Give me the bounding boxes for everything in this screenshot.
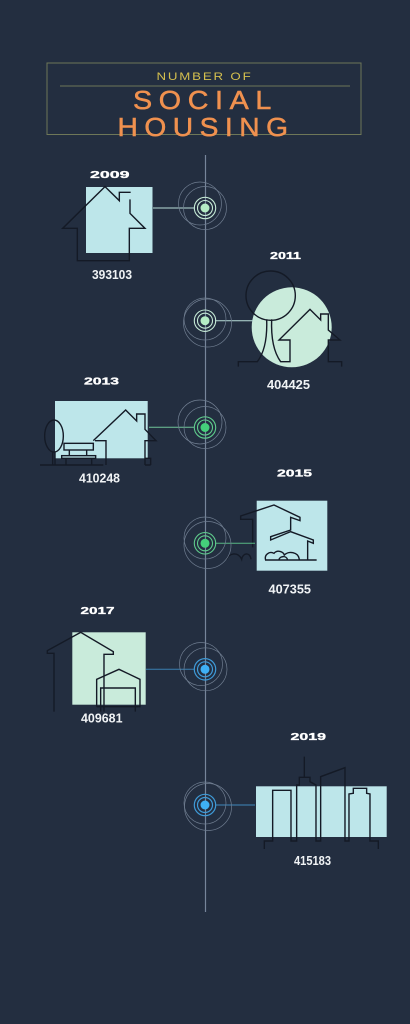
value 409681: 409681 bbox=[81, 711, 123, 725]
image circle 2011 bbox=[252, 287, 332, 367]
milestone 2013 bbox=[40, 376, 226, 486]
title frame bbox=[47, 63, 361, 134]
connector 2015 bbox=[215, 542, 255, 544]
milestone 2017 bbox=[47, 606, 227, 725]
icon: house, tree and bench outline 2013 bbox=[40, 410, 156, 465]
title divider bbox=[60, 85, 350, 87]
title: number of: NUMBER OF bbox=[156, 71, 252, 83]
title: housing: HOUSING bbox=[118, 112, 294, 142]
icon: two-storey house outline 2015 bbox=[227, 505, 317, 560]
value 410248: 410248 bbox=[79, 472, 120, 486]
milestone 2019 bbox=[184, 732, 387, 868]
timeline node 2017 bbox=[180, 642, 227, 691]
timeline axis bbox=[204, 155, 206, 912]
milestone 2011 bbox=[184, 251, 342, 392]
image square 2013 bbox=[55, 401, 148, 458]
image square 2017 bbox=[72, 632, 146, 705]
title block bbox=[47, 63, 361, 142]
year 2013: 2013 bbox=[84, 376, 120, 388]
timeline node 2019 bbox=[184, 782, 232, 830]
icon: house with garage outline 2017 bbox=[47, 632, 140, 712]
icon: tree and house outline 2011 bbox=[238, 271, 342, 367]
value 415183: 415183 bbox=[294, 854, 331, 868]
timeline node 2013 bbox=[178, 400, 226, 448]
year 2015: 2015 bbox=[277, 469, 313, 480]
icon: house outline 2009 bbox=[63, 187, 145, 261]
value 393103: 393103 bbox=[92, 268, 132, 282]
image square 2015 bbox=[257, 501, 327, 571]
icon: skyline outline 2019 bbox=[264, 757, 378, 849]
value 404425: 404425 bbox=[267, 378, 310, 392]
image rectangle 2019 bbox=[256, 786, 387, 837]
year 2011: 2011 bbox=[270, 251, 302, 262]
milestone 2015 bbox=[184, 469, 327, 596]
connector 2013 bbox=[149, 426, 194, 428]
timeline node 2011 bbox=[184, 298, 232, 347]
year 2019: 2019 bbox=[290, 732, 327, 743]
year 2017: 2017 bbox=[80, 606, 115, 617]
title: social: SOCIAL bbox=[133, 85, 278, 115]
milestone 2009 bbox=[63, 170, 226, 282]
connector 2009 bbox=[153, 207, 195, 209]
connector 2019 bbox=[216, 804, 255, 806]
timeline node 2009 bbox=[178, 182, 226, 230]
image square 2009 bbox=[86, 187, 152, 253]
connector 2011 bbox=[215, 320, 253, 322]
value 407355: 407355 bbox=[268, 582, 311, 596]
timeline node 2015 bbox=[184, 517, 231, 568]
connector 2017 bbox=[146, 668, 194, 670]
year 2009: 2009 bbox=[90, 170, 130, 181]
